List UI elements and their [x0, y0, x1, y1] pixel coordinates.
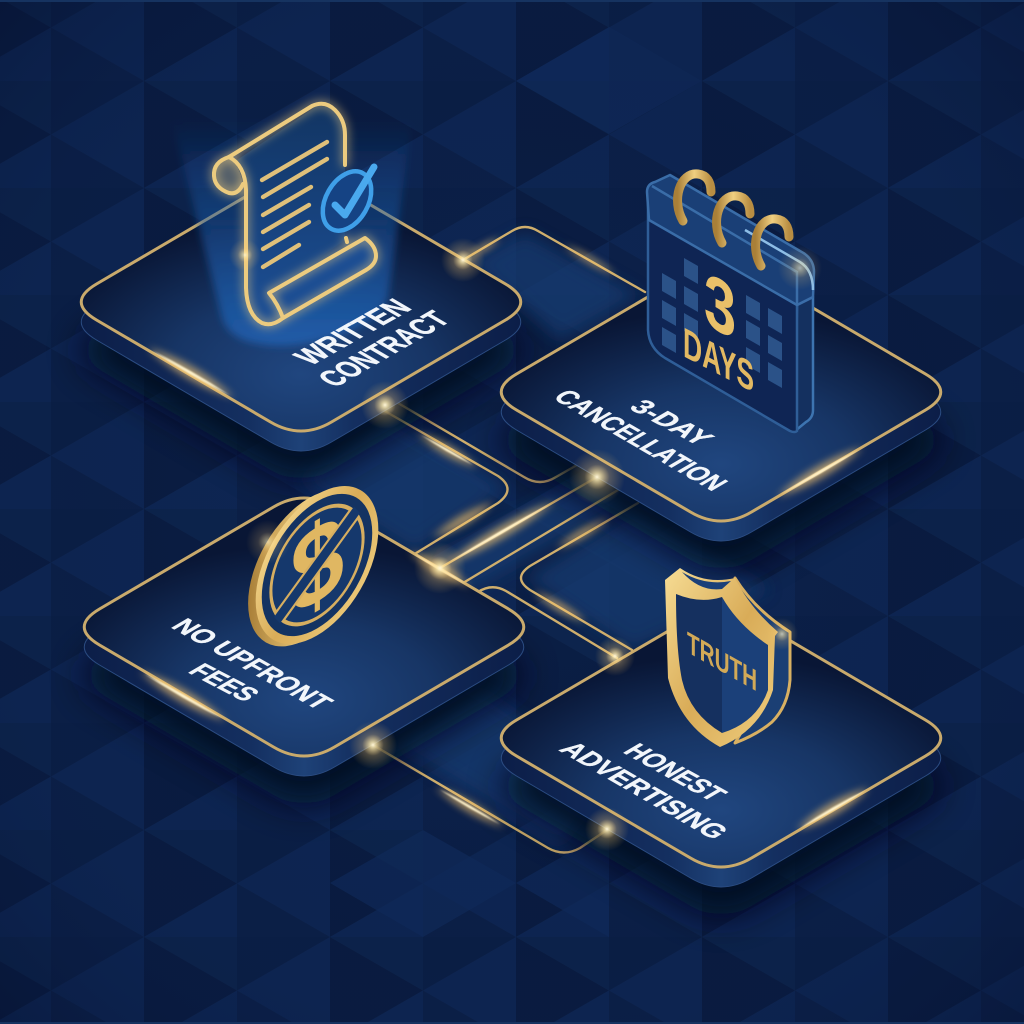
- panel shadow: [84, 546, 524, 804]
- edge highlights: [794, 783, 872, 835]
- connector glows: [414, 235, 617, 831]
- connector: no upfront fees to 3-day cancellation B: [463, 490, 618, 583]
- panel shadow: [81, 221, 521, 479]
- panel gold outline: [81, 173, 521, 431]
- label: no upfront fees: FEES: [182, 659, 267, 705]
- shield rim: [665, 568, 778, 747]
- panel top surface: [501, 609, 941, 867]
- shield face left: [676, 594, 722, 733]
- calendar header: [647, 175, 814, 305]
- connector: written contract to 3-day cancellation: [463, 227, 645, 292]
- edge highlights: [774, 442, 866, 502]
- panel top surface: [81, 173, 521, 431]
- panel: 3-day cancellation: [501, 174, 941, 569]
- panel: honest advertising: [501, 568, 941, 915]
- panel top surface: [501, 263, 941, 521]
- panel side: [501, 629, 941, 887]
- icon: crossed-out dollar coin: [246, 463, 375, 673]
- label: 3-day cancellation: CANCELLATION: [546, 386, 733, 495]
- connectors between panels: [373, 227, 645, 852]
- slash: [280, 513, 354, 617]
- label: honest advertising: HONEST: [617, 739, 734, 805]
- panel shadow: [501, 657, 941, 915]
- shield top sliver: [682, 572, 731, 589]
- scroll paper: [237, 106, 345, 322]
- edge highlights: [137, 547, 473, 726]
- connector: no upfront fees to honest advertising: [478, 587, 617, 658]
- dollar symbol: $: [290, 485, 344, 643]
- connector: 3-day cancellation to honest advertising: [521, 503, 638, 650]
- calendar days word: DAYS: [683, 318, 754, 402]
- panel side: [81, 193, 521, 451]
- panel: no upfront fees: [84, 463, 524, 804]
- panel: written contract: [81, 104, 521, 479]
- panel side: [84, 518, 524, 776]
- calendar front face: [648, 190, 797, 432]
- panel gold outline: [501, 263, 941, 521]
- shield word: TRUTH: [687, 625, 757, 698]
- connector zone tints: [300, 232, 770, 845]
- label: honest advertising: ADVERTISING: [553, 737, 736, 843]
- icon: truth shield: [665, 568, 798, 747]
- label: written contract: CONTRACT: [311, 306, 459, 392]
- label: written contract: WRITTEN: [287, 295, 420, 370]
- calendar right side: [795, 297, 813, 431]
- icon: calendar: [647, 174, 822, 432]
- scroll bottom roll fill: [269, 238, 376, 318]
- panel gold outline: [84, 498, 524, 756]
- connector: written contract to no upfront fees: [383, 410, 508, 555]
- shield glint: [766, 618, 798, 650]
- connector: no upfront fees to honest advertising bottom: [373, 745, 607, 852]
- coin face: [259, 464, 375, 666]
- calendar day squares: [662, 258, 782, 388]
- shield face right: [722, 597, 768, 733]
- panel top surface: [84, 498, 524, 756]
- check badge: [313, 163, 381, 239]
- scroll text lines: [262, 142, 327, 267]
- light beam: [172, 120, 412, 346]
- junction sparkles: [229, 238, 635, 851]
- panel side: [501, 283, 941, 541]
- connector: written contract to 3-day cancellation lower: [398, 403, 577, 482]
- coin glint: [246, 520, 290, 564]
- panel gold outline: [501, 609, 941, 867]
- edge highlights: [145, 343, 237, 403]
- label: no upfront fees: NO UPFRONT: [165, 614, 340, 714]
- scroll outline: [214, 104, 376, 324]
- panel shadow: [501, 311, 941, 569]
- shield side: [735, 578, 790, 743]
- coin edge: [248, 463, 370, 673]
- connector: no upfront fees to 3-day cancellation A: [440, 477, 597, 568]
- calendar corner highlight: [778, 246, 822, 290]
- label: 3-day cancellation: 3-DAY: [623, 395, 721, 450]
- icon: scroll with check: [214, 104, 381, 324]
- calendar rings: [678, 174, 789, 266]
- scroll curl fill: [214, 157, 243, 193]
- calendar number: 3: [704, 256, 736, 358]
- calendar header crease: [652, 186, 797, 305]
